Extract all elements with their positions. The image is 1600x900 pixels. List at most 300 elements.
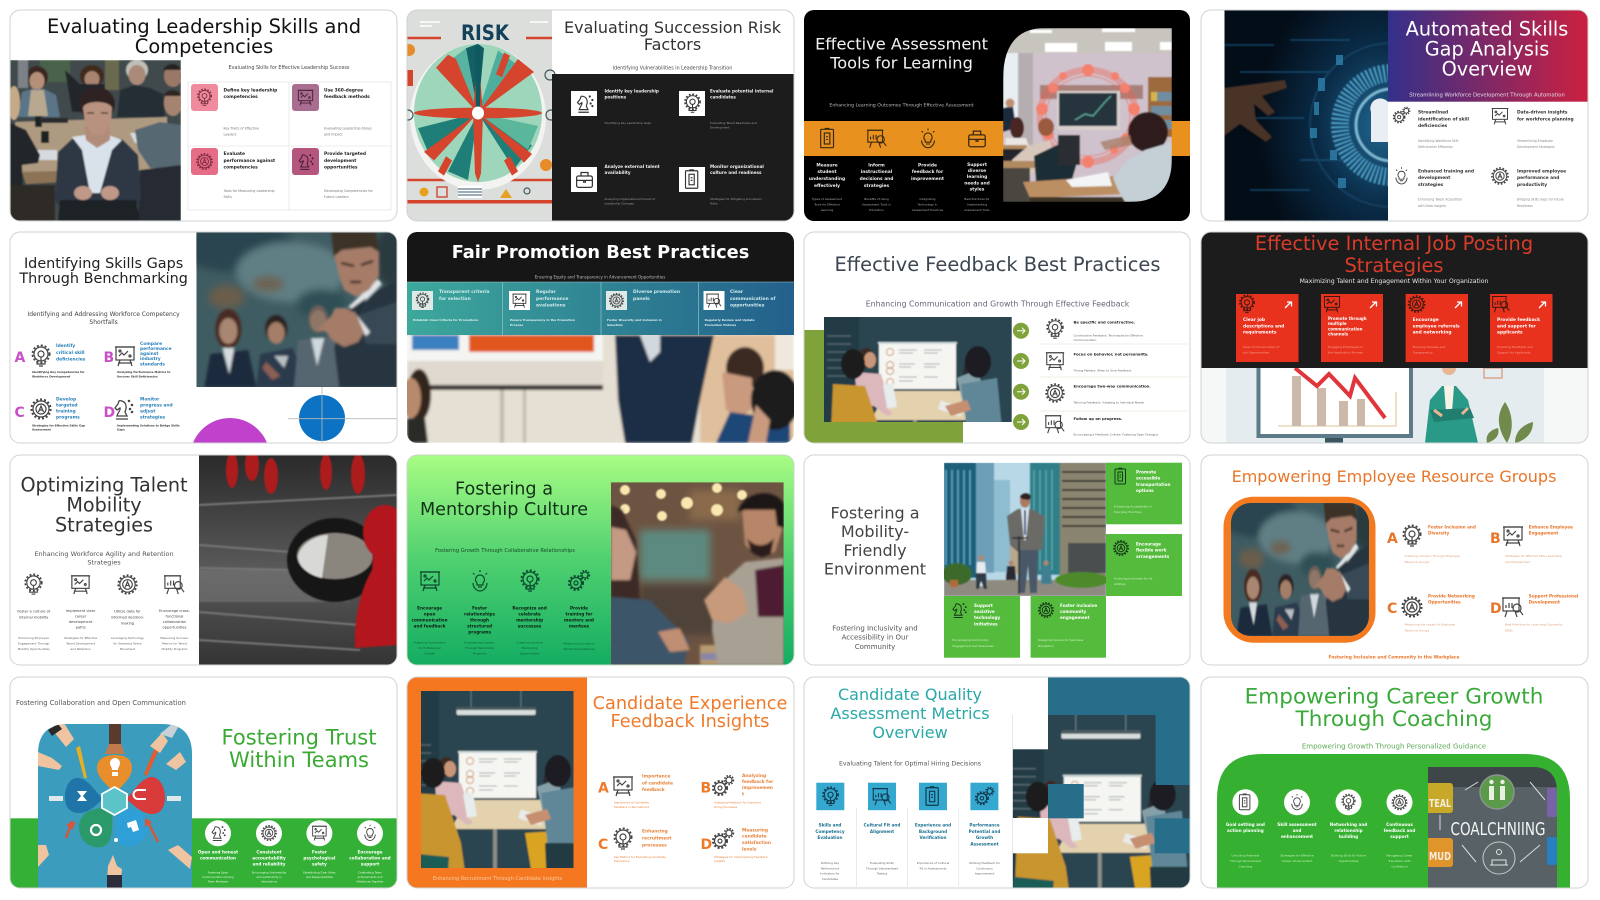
- item: Skills and Competency Evaluation: Defining Key: [821, 861, 839, 865]
- item: Provide training for mentors and mentees: mentors and: [564, 618, 594, 622]
- item: Regular performance evaluations: Ensure Transparency in the Promotion: [510, 318, 575, 322]
- item D: [1490, 594, 1579, 632]
- subtitle: Maximizing Talent and Engagement Within Your Organization: [1300, 278, 1489, 285]
- item: Clear job descriptions: Job Opportunities: [1242, 350, 1269, 354]
- item: Skills and Competency Evaluation: Competency: [815, 829, 845, 834]
- item A: deficiencies: [56, 356, 86, 362]
- item 1: Be specific and constructive: Be specific and constructive.: [1074, 320, 1136, 324]
- item D: [700, 828, 771, 863]
- item: Support assistive technology initiatives: technology: [974, 615, 1000, 620]
- item C: targeted: [56, 402, 78, 408]
- item: Encourage employee referrals: Ensuring Fairness and: [1413, 345, 1446, 349]
- item: Diverse promotion panels: Foster Diversity and Inclusion in: [607, 318, 662, 322]
- item: Provide training for mentors and mentees: [563, 571, 595, 651]
- item: Enhanced training: strategies: [1418, 182, 1444, 188]
- item: Enhanced training: [1396, 167, 1474, 208]
- item C: Strategies for Effective Skills Gap: [32, 424, 85, 428]
- item: Foster psychological safety: Foster: [312, 850, 328, 854]
- item: Encourage collaboration and support: Celebrating Team: [358, 870, 382, 874]
- item: Cultural Fit and Alignment: Through Standardized: [865, 866, 898, 870]
- panel: Optimizing Talent Mobility Strategies: [10, 449, 407, 665]
- item A: Identify: [56, 343, 75, 349]
- title: Fair Promotion Best Practices: [452, 242, 749, 263]
- item: Networking and relationship building: Opportunities: [1339, 859, 1359, 863]
- item D: Insights: [714, 859, 725, 863]
- item: Improved employee performance: Bridging Skills Gaps for Future: [1517, 198, 1564, 202]
- panel: Fostering Trust Within Teams: [10, 677, 397, 888]
- item: Skills and Competency Evaluation: Evaluation: [818, 835, 842, 840]
- item: Clear communication: Clear: [730, 289, 744, 295]
- item: Inform instructional decisions and strategies: Education: [869, 208, 884, 212]
- item: Identify key leadership positions: [571, 88, 659, 125]
- title: Effective Feedback Best Practices: [835, 253, 1160, 276]
- item: Foster psychological safety: [303, 820, 336, 879]
- item: Promote through multiple channels: communication: [1328, 326, 1363, 332]
- panel: Effective Assessment Tools for Learning: [804, 10, 1190, 221]
- item: Experience and Background Verification: Fit in Assessments: [920, 866, 947, 870]
- item: Utilize data for informed decision-making: Movement: [120, 647, 136, 651]
- item: Promote accessible transportation options: Everyday Practices: [1114, 510, 1142, 514]
- title: Fostering a: [830, 504, 920, 522]
- footer tagline: Fostering Inclusion and Community in the Workplace: [1328, 654, 1460, 660]
- caption: Enhancing Recruitment Through Candidate Insights: [433, 876, 562, 882]
- item A: Feedback in Recruitment: [614, 805, 650, 809]
- item: Encourage collaboration and support: collaboration and: [349, 856, 391, 860]
- item D: levels: [742, 846, 757, 852]
- title: Overview: [1442, 58, 1532, 80]
- item: Transparent criteria: [412, 289, 490, 322]
- item: Encourage employee referrals: [1406, 294, 1468, 362]
- item: Provide feedback for improvement: feedback for: [912, 169, 944, 175]
- item: Continuous feedback and support: Continuous: [1386, 822, 1413, 827]
- item: Encourage open communication and feedback: communication: [412, 618, 448, 622]
- item: Networking and relationship building: relationship: [1334, 828, 1363, 833]
- panel: Evaluating Succession Risk Factors: [403, 10, 794, 221]
- photo: pointing man: [196, 232, 396, 387]
- item: Encourage collaboration and support: [349, 820, 391, 884]
- item: Implement clear career development paths: Strategies for Effective: [64, 636, 97, 640]
- item: Support diverse learning needs and styles: Assessment Tools: [964, 208, 990, 212]
- item: Foster inclusive community engagement: Foster inclusive: [1060, 603, 1097, 608]
- subtitle: Evaluating Talent for Optimal Hiring Decisions: [839, 760, 981, 768]
- item: Encourage cross-functional collaboration: Measuring Success:: [160, 636, 189, 640]
- item: Encourage open communication and feedback: and feedback: [414, 624, 446, 628]
- item: Skills and Competency Evaluation: Candidates: [822, 877, 839, 881]
- item: Foster inclusive community engagement: [1031, 596, 1106, 658]
- item: Recognize and celebrate mentorship successes: celebrate: [518, 612, 541, 616]
- item: Monitor organizational culture and readiness: Strategies for Mitigating Succession: [710, 197, 762, 201]
- orange sidebar: [407, 677, 587, 888]
- title: Through Benchmarking: [18, 271, 188, 287]
- title: Evaluating Succession Risk: [564, 18, 781, 37]
- item: Measure student understanding effectively: effectively: [814, 183, 840, 189]
- item: Data-driven insights: for workforce planning: [1517, 116, 1574, 122]
- item: Encourage cross-functional collaboration: opportunities: [163, 626, 187, 630]
- item: Utilize data for informed decision-making: [111, 575, 145, 651]
- item: Recognize and celebrate mentorship successes: Recognize and: [512, 606, 547, 610]
- item: Performance Potential and Growth Assessment: Improvement: [975, 872, 995, 876]
- item: Foster relationships through structured programs: programs: [468, 630, 491, 634]
- item: Provide feedback for improvement: Integrating: [920, 197, 936, 201]
- item: Foster inclusive community engagement: Navigation: [1038, 644, 1054, 648]
- item: Skill assessment and enhancement: Career Advancement: [1282, 859, 1313, 863]
- item: Measure student understanding effectively: Measure: [816, 162, 838, 168]
- item: Continuous feedback and support: Transitions with: [1387, 859, 1411, 863]
- item C: Key Metrics for Evaluating Candidate: [614, 855, 666, 859]
- item: Experience and Background Verification: Experience and: [915, 822, 951, 828]
- item B: standards: [140, 362, 165, 368]
- item: Support assistive technology initiatives: [944, 596, 1020, 658]
- item 2: Focus on behavior: Timing Matters: When to Give Feedback: [1072, 368, 1132, 372]
- title: Effective Internal Job Posting: [1255, 232, 1533, 255]
- item: Encourage cross-functional collaboration: functional: [166, 614, 183, 618]
- item: Recognize and celebrate mentorship successes: Mentorship: [522, 646, 538, 650]
- item: Inform instructional decisions and strategies: Benefits of Using: [864, 197, 889, 201]
- green panel: [1217, 754, 1570, 888]
- item: Data-driven insights: Data-driven insights: [1517, 110, 1568, 116]
- item: Support assistive technology initiatives: Engagement and Awareness: [952, 644, 994, 648]
- item C: [1387, 594, 1475, 632]
- item D: ERGs: [1505, 628, 1513, 632]
- dark header: [1201, 232, 1588, 368]
- item A: Importance of Candidate: [614, 801, 649, 805]
- item: Open and honest communication: Open and honest: [198, 850, 238, 854]
- item D: adjust: [140, 408, 155, 414]
- item: Goal setting and action planning: [1226, 789, 1265, 868]
- title: Empowering Employee Resource Groups: [1232, 467, 1556, 486]
- item: Performance Potential and Growth Assessment: Assessment: [970, 841, 999, 846]
- item: Regular performance evaluations: performance: [536, 296, 568, 302]
- item: Skill assessment and enhancement: Strategies for Effective: [1280, 854, 1314, 858]
- item: Encourage cross-functional collaboration: collaboration: [163, 620, 186, 624]
- item: Promote through multiple channels: Promote through: [1328, 316, 1367, 321]
- item C: C: [14, 405, 25, 421]
- item: Streamlined identification: Streamlined: [1418, 110, 1448, 116]
- item: Regular performance evaluations: [509, 289, 575, 327]
- item: Consistent accountability and reliability: [252, 820, 287, 884]
- item A: A: [14, 350, 26, 366]
- title: Optimizing Talent: [20, 474, 188, 496]
- item: Provide training for mentors and mentees: Measuring Success in: [563, 642, 595, 646]
- item: Inform instructional decisions and strategies: strategies: [864, 183, 889, 189]
- item: Foster a culture of internal mobility: Mobility Opportunities: [18, 647, 50, 651]
- item: Define key leadership competencies: competencies: [224, 94, 258, 100]
- item: Identify key leadership positions: Identify key leadership: [604, 88, 659, 94]
- item C: Measuring the Impact of Employee: [1405, 622, 1455, 626]
- item: Experience and Background Verification: Importance of Cultural: [917, 861, 949, 865]
- item: Provide feedback for improvement: [911, 128, 944, 212]
- title: Mobility-: [841, 522, 909, 541]
- item D: strategies: [140, 414, 166, 420]
- title: Identifying Skills Gaps: [24, 256, 183, 272]
- photo: coaching chalkboard: MUD: [1429, 850, 1451, 863]
- gradient header: [1388, 10, 1588, 102]
- item: Measure student understanding effectively: [809, 128, 845, 212]
- item: Diverse promotion panels: [606, 289, 680, 327]
- item: Consistent accountability and reliability: and Authenticity in: [256, 875, 282, 879]
- item C: Develop: [56, 396, 76, 402]
- item: Encourage collaboration and support: Encourage: [358, 850, 383, 854]
- item: Monitor organizational culture and readiness: culture and readiness: [710, 170, 762, 175]
- item: Encourage employee referrals: employee referrals: [1413, 323, 1460, 329]
- item A: Resource Groups: [1405, 560, 1430, 564]
- title: Within Teams: [229, 748, 369, 772]
- item: Encourage cross-functional collaboration: Metrics for Talent: [162, 642, 188, 646]
- item B: against: [140, 351, 158, 357]
- photo: coaching chalkboard: TEAL: [1429, 797, 1451, 810]
- item: Networking and relationship building: Building Skills for Future: [1331, 854, 1366, 858]
- item: Encourage cross-functional collaboration: Mobility Programs: [162, 647, 188, 651]
- photo: two people talking: [611, 482, 784, 665]
- item: Promote through multiple channels: multiple: [1328, 321, 1347, 326]
- item C: Opportunities: [1428, 600, 1461, 604]
- item: Provide training for mentors and mentees: Mentorship Initiatives: [563, 647, 595, 651]
- title: Automated Skills: [1406, 18, 1568, 40]
- item: Networking and relationship building: [1330, 789, 1367, 863]
- item B: industry: [140, 356, 161, 362]
- item: Foster a culture of internal mobility: Enhancing Employee: [19, 636, 49, 640]
- item: Provide feedback and support: Provide feedback: [1497, 317, 1540, 323]
- photo: meeting room: [824, 317, 1012, 422]
- item B: t: [742, 792, 744, 798]
- title: Mobility: [66, 494, 142, 516]
- item: Encourage flexible work arrangements: [1106, 534, 1182, 596]
- item: Open and honest communication: Fostering Open: [208, 870, 229, 874]
- item D: Monitor: [140, 396, 160, 402]
- item: Evaluate performance against competencies: performance against: [224, 158, 275, 164]
- item: Diverse promotion panels: panels: [633, 296, 650, 302]
- subtitle: Streamlining Workforce Development Through Automation: [1409, 92, 1565, 98]
- item: Inform instructional decisions and strategies: instructional: [861, 169, 893, 175]
- item: Inform instructional decisions and strategies: Assessment Tools in: [862, 202, 891, 206]
- item: Skill assessment and enhancement: Skill assessment: [1277, 822, 1317, 827]
- item: Goal setting and action planning: Coaching: [1239, 864, 1252, 868]
- title: Tools for Learning: [829, 54, 973, 72]
- item: Recognize and celebrate mentorship successes: successes: [518, 624, 542, 628]
- item: Enhanced training: with Data Insights: [1418, 204, 1446, 208]
- item D: Implementing Solutions to Bridge Skills: [117, 424, 180, 428]
- item: Evaluate potential internal candidates: [679, 88, 774, 130]
- item: Improved employee performance: performance and: [1517, 175, 1559, 181]
- item C: [14, 396, 85, 432]
- photo: coaching chalkboard: COALCHNIING: [1450, 819, 1546, 840]
- item: Provide training for mentors and mentees: training for: [566, 612, 593, 616]
- item: Monitor organizational culture and readiness: [679, 164, 764, 206]
- item: Provide feedback and support: Providing Feedback and: [1497, 345, 1533, 349]
- photo: presenter and audience: [401, 282, 799, 443]
- item: Provide feedback and support: [1490, 294, 1552, 362]
- item: Support assistive technology initiatives: Encouraging Community: [952, 638, 989, 642]
- item: Measure student understanding effectively: Learning: [821, 208, 833, 212]
- item C: Enhancing: [642, 828, 668, 834]
- item: Diverse promotion panels: Selection: [607, 323, 623, 327]
- item: Evaluate performance against competencies: Tools for Measuring Leadership: [222, 189, 275, 193]
- item: Encourage flexible work arrangements: Encourage: [1136, 542, 1161, 546]
- subtitle: Fostering Inclusivity and: [832, 624, 918, 632]
- item: Consistent accountability and reliability: and reliability: [253, 862, 286, 866]
- item: Implement clear career development paths: career: [75, 614, 87, 618]
- item: Use 360-degree feedback methods: and Impact: [324, 132, 343, 136]
- item B: performance: [140, 346, 172, 352]
- item: Streamlined identification: Identifying Workforce Skill: [1418, 139, 1459, 143]
- item: Improved employee performance: productivity: [1517, 182, 1547, 188]
- item C: Resource Groups: [1405, 628, 1430, 632]
- item: Support diverse learning needs and styles: diverse: [968, 168, 986, 174]
- item: Clear communication: communication of: [730, 296, 775, 302]
- panel: Fostering a Mobility-Friendly Environment: [804, 455, 1190, 665]
- item: Encourage cross-functional collaboration: [159, 576, 191, 651]
- green accent block: [804, 330, 963, 443]
- item: Use 360-degree feedback methods: Use 360-degree: [324, 88, 363, 94]
- item: Evaluate performance against competencies: Skills: [224, 195, 232, 199]
- item: Experience and Background Verification: Verification: [919, 835, 947, 840]
- subtitle: Accessibility in Our: [842, 634, 908, 642]
- item: Promote accessible transportation options: Embracing Accessibility in: [1114, 505, 1152, 509]
- item: Consistent accountability and reliability: accountability: [252, 856, 286, 860]
- item B: [700, 773, 774, 809]
- title: Candidate Quality: [838, 685, 982, 704]
- item: Promote through multiple channels: [1321, 294, 1383, 362]
- item: Utilize data for informed decision-making: for Seamless Talent: [113, 642, 142, 646]
- item: Utilize data for informed decision-making: informed decision-: [111, 616, 145, 620]
- item 4: Follow up on progress: Follow up on progress.: [1074, 416, 1123, 421]
- item A: Foster Inclusion and: [1428, 524, 1476, 530]
- panel: Candidate Quality Assessment Metrics Overview: [804, 677, 1214, 900]
- item: Continuous feedback and support: Confidence: [1391, 864, 1408, 868]
- item C: Experience: [614, 859, 630, 863]
- item: Provide targeted development opportunities: Provide targeted: [324, 151, 366, 157]
- item: Skills and Competency Evaluation: Indicators for: [820, 872, 840, 876]
- item: Provide training for mentors and mentees: Provide: [570, 606, 588, 610]
- item: Implement clear career development paths: Implement clear: [66, 609, 96, 613]
- panel: Effective Internal Job Posting Strategies: [1201, 232, 1588, 443]
- subtitle: Ensuring Equity and Transparency in Advancement Opportunities: [535, 274, 665, 280]
- item A: Fostering Inclusion Through Employee: [1405, 554, 1460, 558]
- item: Clear communication: Promotion Policies: [705, 323, 736, 327]
- title: Strategies: [55, 514, 153, 536]
- illustration: risk wheel: [403, 10, 556, 221]
- title: Through Coaching: [1295, 707, 1492, 732]
- item: Define key leadership competencies: Leaders: [224, 132, 237, 136]
- item: Foster inclusive community engagement: Designing Spaces for Seamless: [1038, 638, 1084, 642]
- item: Streamlined identification: deficiencies: [1418, 123, 1448, 129]
- item A: critical skill: [56, 350, 85, 356]
- item: Clear communication: opportunities: [730, 302, 765, 308]
- title: Fostering Trust: [222, 726, 376, 750]
- item: Data-driven insights: Development Strategies: [1517, 145, 1555, 149]
- panel: Empowering Career Growth Through Coaching: [1201, 677, 1588, 888]
- item: Encourage employee referrals: Encourage: [1413, 317, 1439, 323]
- title: Candidate Experience: [593, 694, 787, 714]
- item 4: Follow up on progress: Encouraging a Feedback Culture: Fostering Open Dialogue: [1074, 432, 1158, 436]
- item: Goal setting and action planning: Goal setting and: [1226, 822, 1265, 827]
- item: Recognize and celebrate mentorship successes: Creating Inclusive: [517, 641, 543, 645]
- item D: [104, 396, 180, 432]
- item: Recognize and celebrate mentorship successes: [512, 570, 547, 655]
- panel: Automated Skills Gap Analysis Overview: [1201, 10, 1588, 221]
- item: Streamlined identification: identification of skill: [1418, 116, 1469, 122]
- item B: Enhance Employee: [1529, 524, 1573, 530]
- item: Inform instructional decisions and strategies: decisions and: [860, 176, 893, 182]
- item D: progress and: [140, 402, 173, 408]
- decorative circles: [193, 387, 396, 442]
- item: Foster a culture of internal mobility: internal mobility: [19, 616, 49, 620]
- item: Promote accessible transportation options: accessible: [1136, 476, 1160, 481]
- item B: Hiring Processes: [714, 805, 738, 809]
- item: Support diverse learning needs and styles: needs and: [964, 180, 990, 186]
- item: Support assistive technology initiatives: Support: [974, 603, 993, 608]
- title: Overview: [872, 723, 948, 742]
- item 3: Encourage two-way communication: Encourage two-way communication.: [1074, 384, 1151, 388]
- item B: Analyzing: [742, 773, 766, 779]
- item A: [14, 343, 86, 378]
- item: Streamlined identification: [1394, 107, 1469, 149]
- item: Improved employee performance: [1492, 168, 1566, 208]
- item D: candidate: [742, 834, 767, 840]
- item: Support diverse learning needs and styles: Support: [967, 162, 987, 168]
- item: Implement clear career development paths: paths: [76, 626, 86, 630]
- item B: Uncover Skill Deficiencies: [117, 374, 158, 378]
- item: Cultural Fit and Alignment: Evaluating Skills: [870, 861, 894, 865]
- item A: Workforce Development: [32, 374, 71, 378]
- item: Measure student understanding effectively: Types of Assessment: [811, 197, 843, 201]
- item: Cultural Fit and Alignment: Testing: [876, 872, 887, 876]
- item: Improved employee performance: Improved employee: [1517, 168, 1566, 174]
- image: digital hand and rings: [1224, 10, 1388, 220]
- item: Monitor organizational culture and readiness: Monitor organizational: [710, 164, 764, 169]
- item 2: Focus on behavior: Focus on behavior, not personality.: [1074, 352, 1149, 356]
- item: Encourage open communication and feedback: Growth: [424, 651, 435, 655]
- subtitle: Community: [855, 643, 895, 651]
- title: Environment: [824, 560, 926, 579]
- subtitle: Empowering Growth Through Personalized Guidance: [1302, 742, 1486, 750]
- item: Encourage collaboration and support: support: [361, 862, 379, 866]
- panel: Effective Feedback Best Practices: [789, 232, 1190, 494]
- item: Clear communication: [704, 289, 775, 327]
- item: Provide feedback and support: Support for Applicants: [1497, 350, 1531, 354]
- item C: processes: [642, 842, 667, 848]
- item: Networking and relationship building: building: [1339, 834, 1358, 839]
- item: Utilize data for informed decision-making: making: [121, 622, 134, 626]
- photo: classroom with red ring: [1003, 28, 1172, 202]
- item: Performance Potential and Growth Assessment: Potential and: [969, 829, 1000, 834]
- photo: coaching chalkboard: [1426, 767, 1557, 888]
- item: Clear communication: Regularly Review and Update: [705, 318, 755, 322]
- item D: D: [104, 405, 115, 421]
- table of competencies: [188, 82, 391, 210]
- item: Encourage employee referrals: Transparency: [1412, 350, 1433, 354]
- illustration: monitor, chart and person: [1226, 361, 1544, 443]
- item: Promote through multiple channels: Engaging Employees in: [1328, 345, 1363, 349]
- item: Transparent criteria: Transparent criteria: [439, 289, 490, 295]
- item B: B: [104, 350, 114, 366]
- item: Foster psychological safety: Establishing Clear Roles: [303, 870, 336, 874]
- item: Encourage flexible work arrangements: Fostering Inclusivity for All: [1114, 576, 1152, 580]
- item: Skills and Competency Evaluation: [815, 783, 845, 881]
- item: Use 360-degree feedback methods: Evaluating Leadership Styles: [324, 126, 372, 130]
- item: Use 360-degree feedback methods: feedback methods: [324, 94, 370, 100]
- item: Goal setting and action planning: Through Personalized: [1229, 859, 1261, 863]
- item: Foster relationships through structured programs: through: [470, 618, 489, 622]
- item: Foster a culture of internal mobility: [17, 574, 51, 651]
- item: Evaluate potential internal candidates: candidates: [710, 94, 736, 100]
- item 3: Encourage two-way communication: Tailoring Feedback: Adapting to Individual Needs: [1072, 400, 1144, 404]
- item: Skills and Competency Evaluation: Skills and: [819, 822, 841, 828]
- subtitle: Fostering Growth Through Collaborative Relationships: [435, 548, 575, 554]
- item D: Support Professional: [1529, 594, 1579, 598]
- item B: Analyzing Feedback for Improved: [714, 801, 761, 805]
- item C: Provide Networking: [1428, 594, 1475, 598]
